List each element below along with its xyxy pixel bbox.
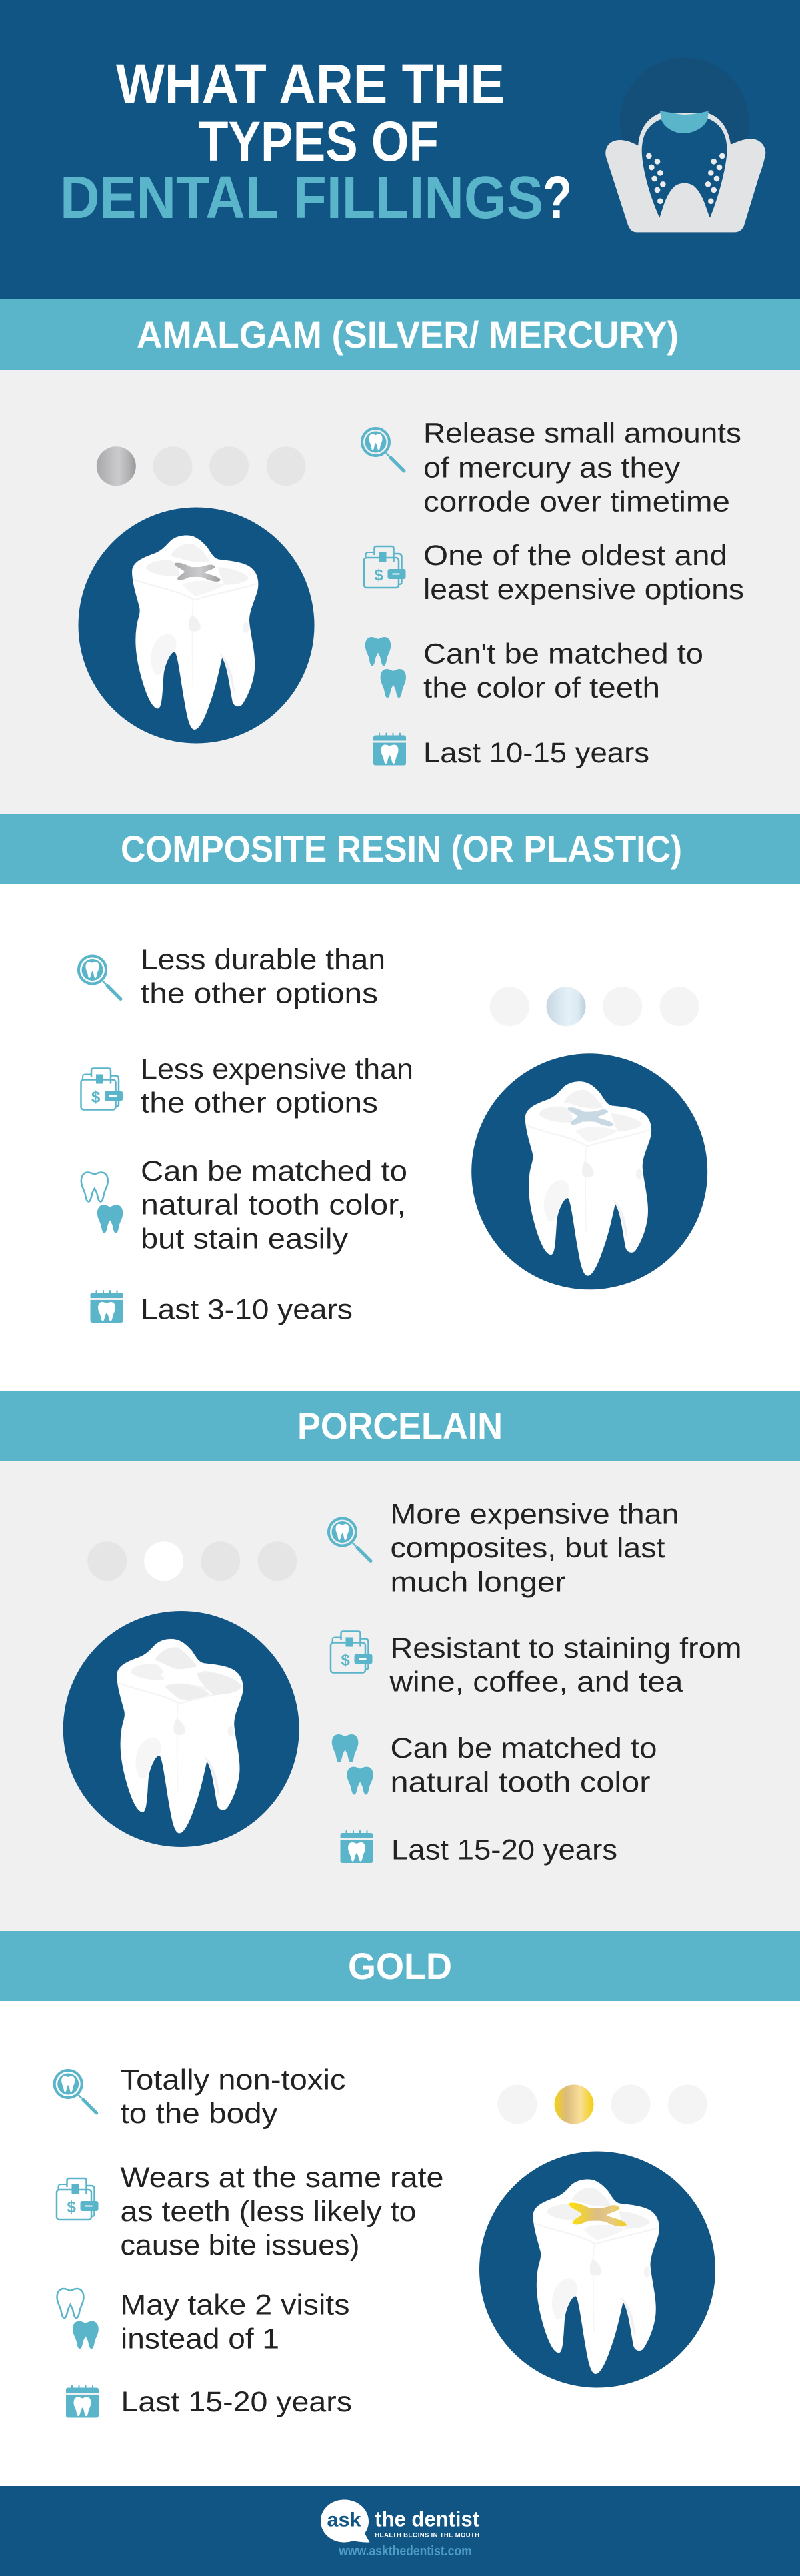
material dots [490,987,699,1026]
bullet: stain resistance: Resistant to staining from [391,1632,741,1664]
bullet: cost: the other options [141,1087,378,1119]
bullet: cost: least expensive options [423,574,744,606]
bullet: lifespan [91,1291,353,1325]
bullet: color: natural tooth color [391,1766,651,1798]
bullet: color: natural tooth color, [141,1189,406,1221]
tooth with gold filling [479,2152,715,2388]
heading: composite: COMPOSITE RESIN (OR PLASTIC) [121,828,682,870]
bullet: lifespan [373,734,649,769]
title: TYPES OF [199,110,439,173]
bullet: visits [57,2289,349,2355]
bullet: visits: instead of 1 [121,2323,279,2355]
bullet: cost and longevity [329,1498,679,1598]
bullet: non-toxic: to the body [120,2098,278,2130]
icon: tooth with filling in gum [605,57,765,232]
bullet: color: Can be matched to [141,1155,407,1187]
panel: amalgam [0,299,800,814]
bullet: cost [364,540,744,606]
bullet: durability: Less durable than [141,944,385,976]
material dots [87,1541,297,1581]
bullet: color: the color of teeth [423,672,660,704]
bullet: cost [81,1053,413,1119]
panel: gold [0,1931,800,2486]
bullet: wear: cause bite issues) [120,2230,360,2262]
title: DENTAL FILLINGS [60,165,543,231]
bullet: visits: May take 2 visits [120,2289,349,2321]
heading: porcelain: PORCELAIN [297,1405,503,1447]
panel: composite resin [0,814,800,1391]
bullet: wear: as teeth (less likely to [120,2196,416,2228]
title [60,53,572,231]
bullet: stain resistance [331,1632,741,1698]
bullet: color [332,1732,657,1798]
bullet: lifespan: Last 15-20 years [391,1834,617,1866]
heading: amalgam: AMALGAM (SILVER/ MERCURY) [137,313,679,356]
bullet: lifespan: Last 15-20 years [121,2386,352,2418]
bullet: mercury: Release small amounts [423,418,741,450]
heading: gold: GOLD [348,1945,452,1987]
material dots [497,2085,707,2124]
bullet: color: Can be matched to [391,1732,657,1764]
panel: footer [0,2486,800,2576]
panel: header [0,0,800,299]
website: www.askthedentist.com [338,2544,472,2559]
bullet: durability: the other options [141,978,378,1010]
material dots [97,446,306,486]
bullet: color: but stain easily [141,1223,349,1255]
tooth with porcelain filling [63,1611,299,1847]
bullet: lifespan: Last 10-15 years [423,737,649,769]
tagline: HEALTH BEGINS IN THE MOUTH [375,2532,479,2539]
logo: ask speech bubble: ask [327,2509,361,2531]
logo: the dentist: the dentist [375,2507,479,2531]
bullet: non-toxic [55,2064,345,2130]
tooth with composite filling [471,1053,707,1289]
bullet: non-toxic: Totally non-toxic [120,2064,345,2096]
title: WHAT ARE THE [116,53,505,115]
bullet: mercury: corrode over timetime [423,486,730,518]
panel: porcelain [0,1391,800,1931]
bullet: color: Can't be matched to [423,638,703,670]
bullet: lifespan: Last 3-10 years [141,1293,353,1325]
bullet: mercury [362,418,741,518]
bullet: cost and longevity: much longer [391,1566,565,1598]
title: ? [543,165,572,231]
bullet: mercury: of mercury as they [423,452,681,484]
bullet: durability [79,944,385,1010]
bullet: cost: One of the oldest and [423,540,727,572]
tooth with silver filling [79,507,315,743]
bullet: color [81,1155,407,1255]
bullet: cost: Less expensive than [141,1053,413,1085]
bullet: color [365,637,703,704]
bullet: stain resistance: wine, coffee, and tea [389,1666,683,1698]
logo: ask speech bubble [321,2500,369,2543]
bullet: cost and longevity: composites, but last [391,1532,665,1564]
bullet: wear: Wears at the same rate [120,2162,444,2194]
bullet: wear [57,2162,444,2262]
bullet: cost and longevity: More expensive than [391,1498,679,1530]
